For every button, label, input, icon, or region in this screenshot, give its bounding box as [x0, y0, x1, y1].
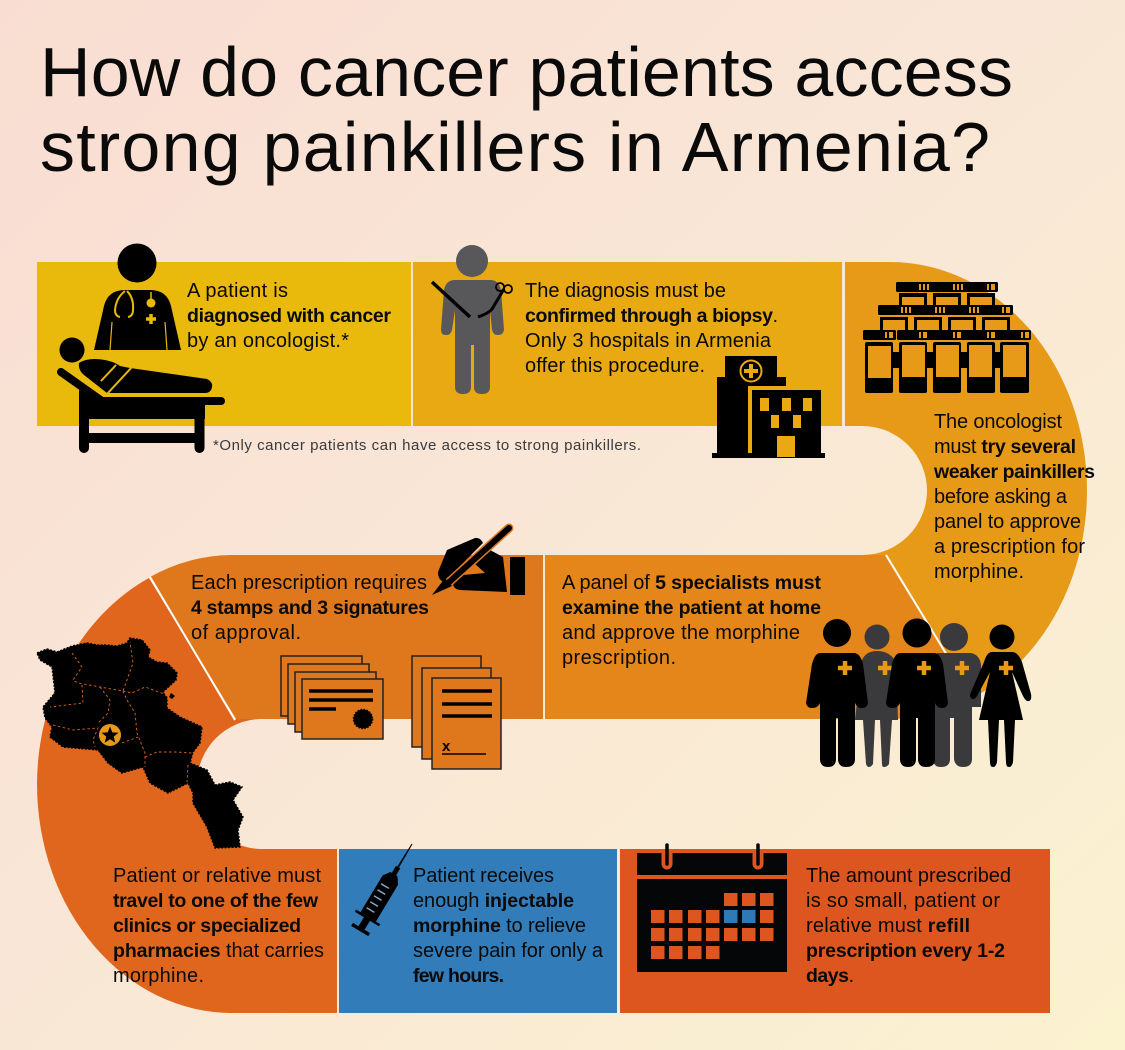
icon: syringe [348, 837, 424, 938]
specialist: grey woman [855, 624, 898, 767]
text: step 1: diagnosed with cancer [187, 305, 391, 327]
specialist: black man centre [886, 618, 948, 767]
text: step 6: travel to one of the few [113, 890, 319, 912]
text: step 7: morphine to relieve [413, 915, 586, 937]
text: step 1: A patient is [187, 280, 288, 302]
text: step 3: panel to approve [934, 511, 1081, 533]
text: step 7: Patient receives [413, 865, 554, 887]
icon: calendar [637, 845, 787, 972]
text: step 8: is so small, patient or [806, 890, 1000, 912]
title: How do cancer patients access [40, 33, 1013, 111]
footnote: *Only cancer patients can have access to strong painkillers. [213, 437, 641, 454]
text: step 3: morphine. [934, 561, 1024, 583]
icon: patient on bed [60, 338, 221, 448]
icon: hospital [712, 356, 825, 458]
title: strong painkillers in Armenia? [40, 108, 990, 186]
text: step 2 [525, 280, 778, 377]
text: step 4: and approve the morphine [562, 622, 800, 644]
icon: hand writing with pen [432, 528, 525, 595]
text: step 3: must try several [934, 436, 1076, 458]
text: step 6: morphine. [113, 965, 204, 987]
text: step 2: Only 3 hospitals in Armenia [525, 330, 772, 352]
panel: step 3 weaker painkillers [845, 262, 1095, 719]
text: step 7: few hours. [413, 965, 504, 987]
text: step 7 [413, 865, 604, 987]
text: step 4 [562, 572, 822, 669]
text: step 8: days. [806, 965, 854, 987]
text: step 8: The amount prescribed [806, 865, 1011, 887]
text: step 8: relative must refill [806, 915, 970, 937]
text: step 4: prescription. [562, 647, 676, 669]
text: step 6: Patient or relative must [113, 865, 321, 887]
icon: map of Armenia [37, 638, 243, 848]
text: step 6: clinics or specialized [113, 915, 301, 937]
text: step 3: a prescription for [934, 536, 1085, 558]
text: step 8: prescription every 1-2 [806, 940, 1005, 962]
text: step 4: A panel of 5 specialists must [562, 572, 822, 594]
icon: doctor [94, 244, 181, 350]
icon: panel of five specialists [806, 618, 1031, 767]
text: step 5: Each prescription requires [191, 572, 427, 594]
text: step 2: The diagnosis must be [525, 280, 726, 302]
text: step 6: pharmacies that carries [113, 940, 324, 962]
panel: step 7 injectable morphine [339, 837, 617, 1013]
icon: stack of signed documents [412, 656, 501, 769]
icon: capital star [99, 724, 121, 746]
text: step 7: enough injectable [413, 890, 574, 912]
text: step 1: by an oncologist.* [187, 330, 349, 352]
icon: stack of signed documents: x [442, 738, 451, 755]
panel: step 6 travel [37, 577, 337, 1013]
title [40, 33, 1013, 186]
panel: step 2 biopsy [413, 245, 842, 458]
text: step 3: before asking a [934, 486, 1068, 508]
text: step 3 [933, 411, 1095, 583]
text: step 7: severe pain for only a [413, 940, 604, 962]
icon: person with biopsy tools [432, 245, 512, 394]
text: step 6 [113, 865, 324, 987]
panel: step 8 refill [620, 845, 1050, 1013]
specialist: grey man [933, 623, 981, 767]
text: step 3: weaker painkillers [933, 461, 1095, 483]
text: step 5: 4 stamps and 3 signatures [191, 597, 429, 619]
panel: step 1 diagnosis [37, 244, 411, 448]
text: step 2: confirmed through a biopsy. [525, 305, 778, 327]
text: step 1 [187, 280, 391, 352]
icon: pill bottles [863, 282, 1031, 393]
panel: step 4 specialists [545, 555, 970, 719]
text: step 4: examine the patient at home [562, 597, 821, 619]
specialist: black man left [806, 619, 868, 767]
text: step 8 [806, 865, 1011, 987]
text: step 3: The oncologist [934, 411, 1062, 433]
text: step 5: of approval. [191, 622, 301, 644]
text: step 5 [191, 572, 429, 644]
panel: step 5 stamps and signatures [150, 528, 543, 769]
text: step 2: offer this procedure. [525, 355, 705, 377]
specialist: black woman [970, 624, 1031, 767]
icon: stack of stamped documents [281, 656, 383, 739]
